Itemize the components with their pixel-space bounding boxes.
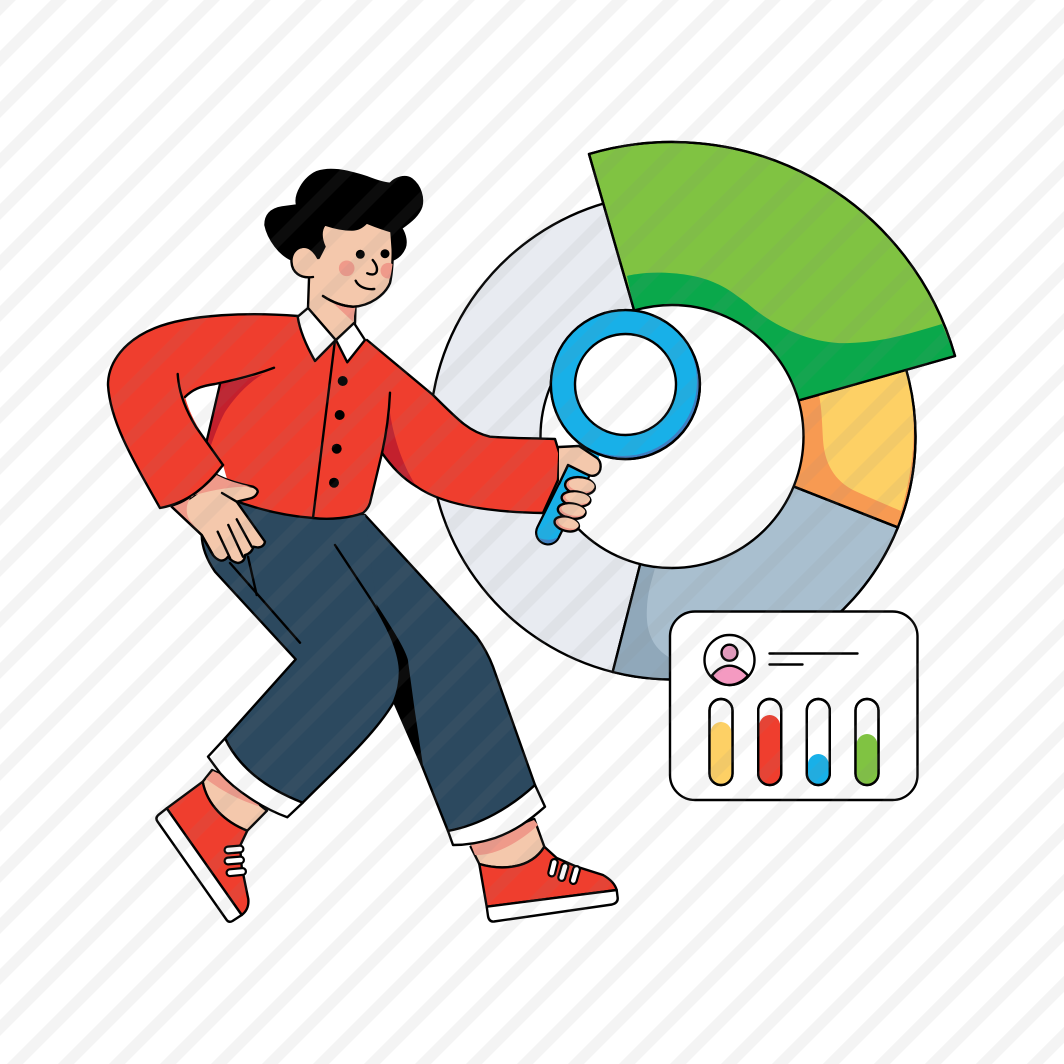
bar: red [758,699,781,785]
sleeve and placket lines [178,340,390,518]
front leg [300,515,535,831]
face skin patch [310,250,345,300]
finger 4 [553,514,581,534]
ring neck [574,443,600,468]
segment: blue grey [613,436,898,680]
back ankle [203,770,267,831]
ring [548,307,700,459]
face [319,214,393,307]
segment: yellow and orange [672,371,916,527]
shoe laces [552,862,576,880]
back leg outline [202,535,400,803]
shirt [108,314,559,519]
front cuff [448,785,545,845]
donut hole [540,305,804,568]
smile [356,281,374,289]
armpit gap [185,384,220,441]
pocket lines [230,557,300,643]
bar: blue [807,699,830,785]
back shoe [156,782,248,922]
nose [367,260,377,274]
back leg [202,503,400,803]
hand lines [172,493,252,558]
segment: green [589,142,955,436]
donut chart [430,142,955,680]
segment: light grey [430,203,672,672]
bar: yellow [710,699,732,785]
trouser crease line [394,702,422,765]
holding hand [553,446,601,534]
shirt outline [108,314,559,519]
shirt body and sleeves fill [108,314,559,519]
finger 1 [564,475,596,497]
hair [265,169,422,260]
cheeks [339,260,396,279]
back cuff [208,738,303,817]
head [265,169,422,307]
text placeholder lines [770,654,858,664]
inner crease shadow [335,545,422,765]
bar: green [856,699,878,785]
eyes [356,249,390,259]
ear [291,247,321,277]
jaw line [323,296,353,307]
front shoe [479,847,618,922]
dashboard card [670,612,918,800]
palm [559,446,601,484]
handle [539,466,581,543]
right sleeve shadow [382,413,417,487]
front ankle [471,819,544,867]
collar [298,308,365,362]
person [108,169,700,922]
back foot [156,770,267,922]
magnifying glass [539,307,700,543]
finger 2 [561,490,591,508]
buttons [329,376,348,488]
trousers [202,503,545,845]
finger 3 [557,501,587,521]
neck [308,270,356,340]
shoe laces [228,849,242,873]
icon: user avatar [704,635,754,685]
card panel [670,612,918,800]
lens [575,334,676,435]
front foot [471,819,618,922]
resting hand [172,475,265,563]
left sleeve shadow [207,374,263,448]
